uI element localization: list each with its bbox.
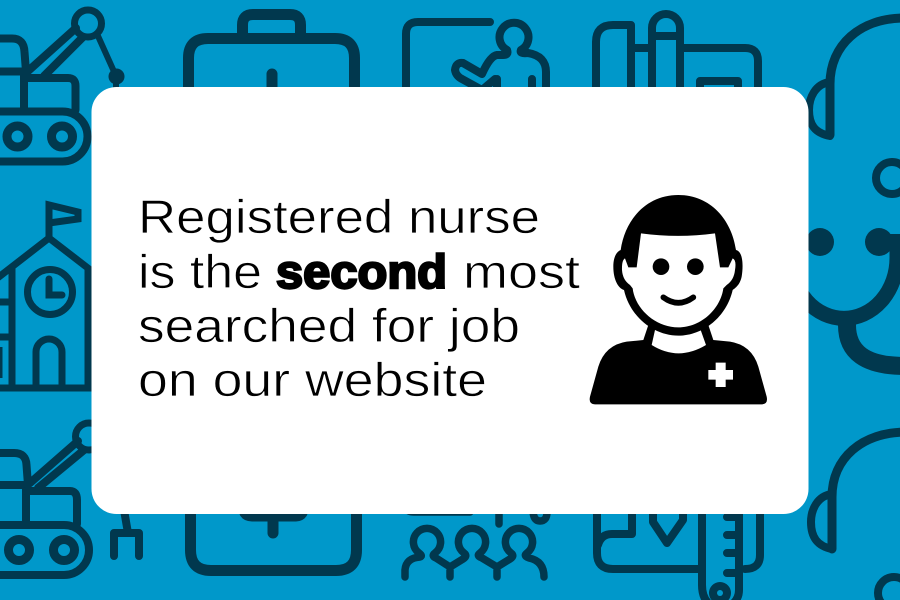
nurse left eye [653, 258, 669, 275]
headline text: most [463, 245, 580, 298]
headline text: is the [138, 245, 262, 298]
nurse face [622, 233, 735, 327]
panel: white card [92, 87, 808, 514]
icon: headset bottom [811, 432, 900, 600]
icon: briefcase top [188, 14, 354, 100]
icon: school [0, 205, 93, 388]
nurse right eye [687, 258, 704, 275]
icon: presenter group bottom [405, 505, 547, 577]
icon: headset top [809, 18, 900, 136]
icon: nurse [590, 195, 767, 404]
nurse smile [663, 297, 693, 303]
headline text: Registered nurse [138, 190, 540, 243]
nurse head outline [613, 195, 743, 336]
icon: presenter [406, 22, 546, 100]
icon: briefcase bottom [190, 505, 356, 570]
headline text [138, 190, 580, 406]
icon: stethoscope [791, 162, 900, 366]
nurse shirt [590, 325, 767, 404]
icon: books and ruler bottom [597, 505, 760, 600]
nurse medical cross [708, 363, 733, 387]
headline text: second [276, 245, 447, 298]
icon: books top [596, 14, 758, 100]
headline text: searched for job [138, 299, 520, 352]
headline text: on our website [138, 353, 487, 406]
nurse collar [652, 330, 706, 353]
icon: crane top [0, 10, 124, 162]
icon: crane bottom [0, 423, 139, 575]
